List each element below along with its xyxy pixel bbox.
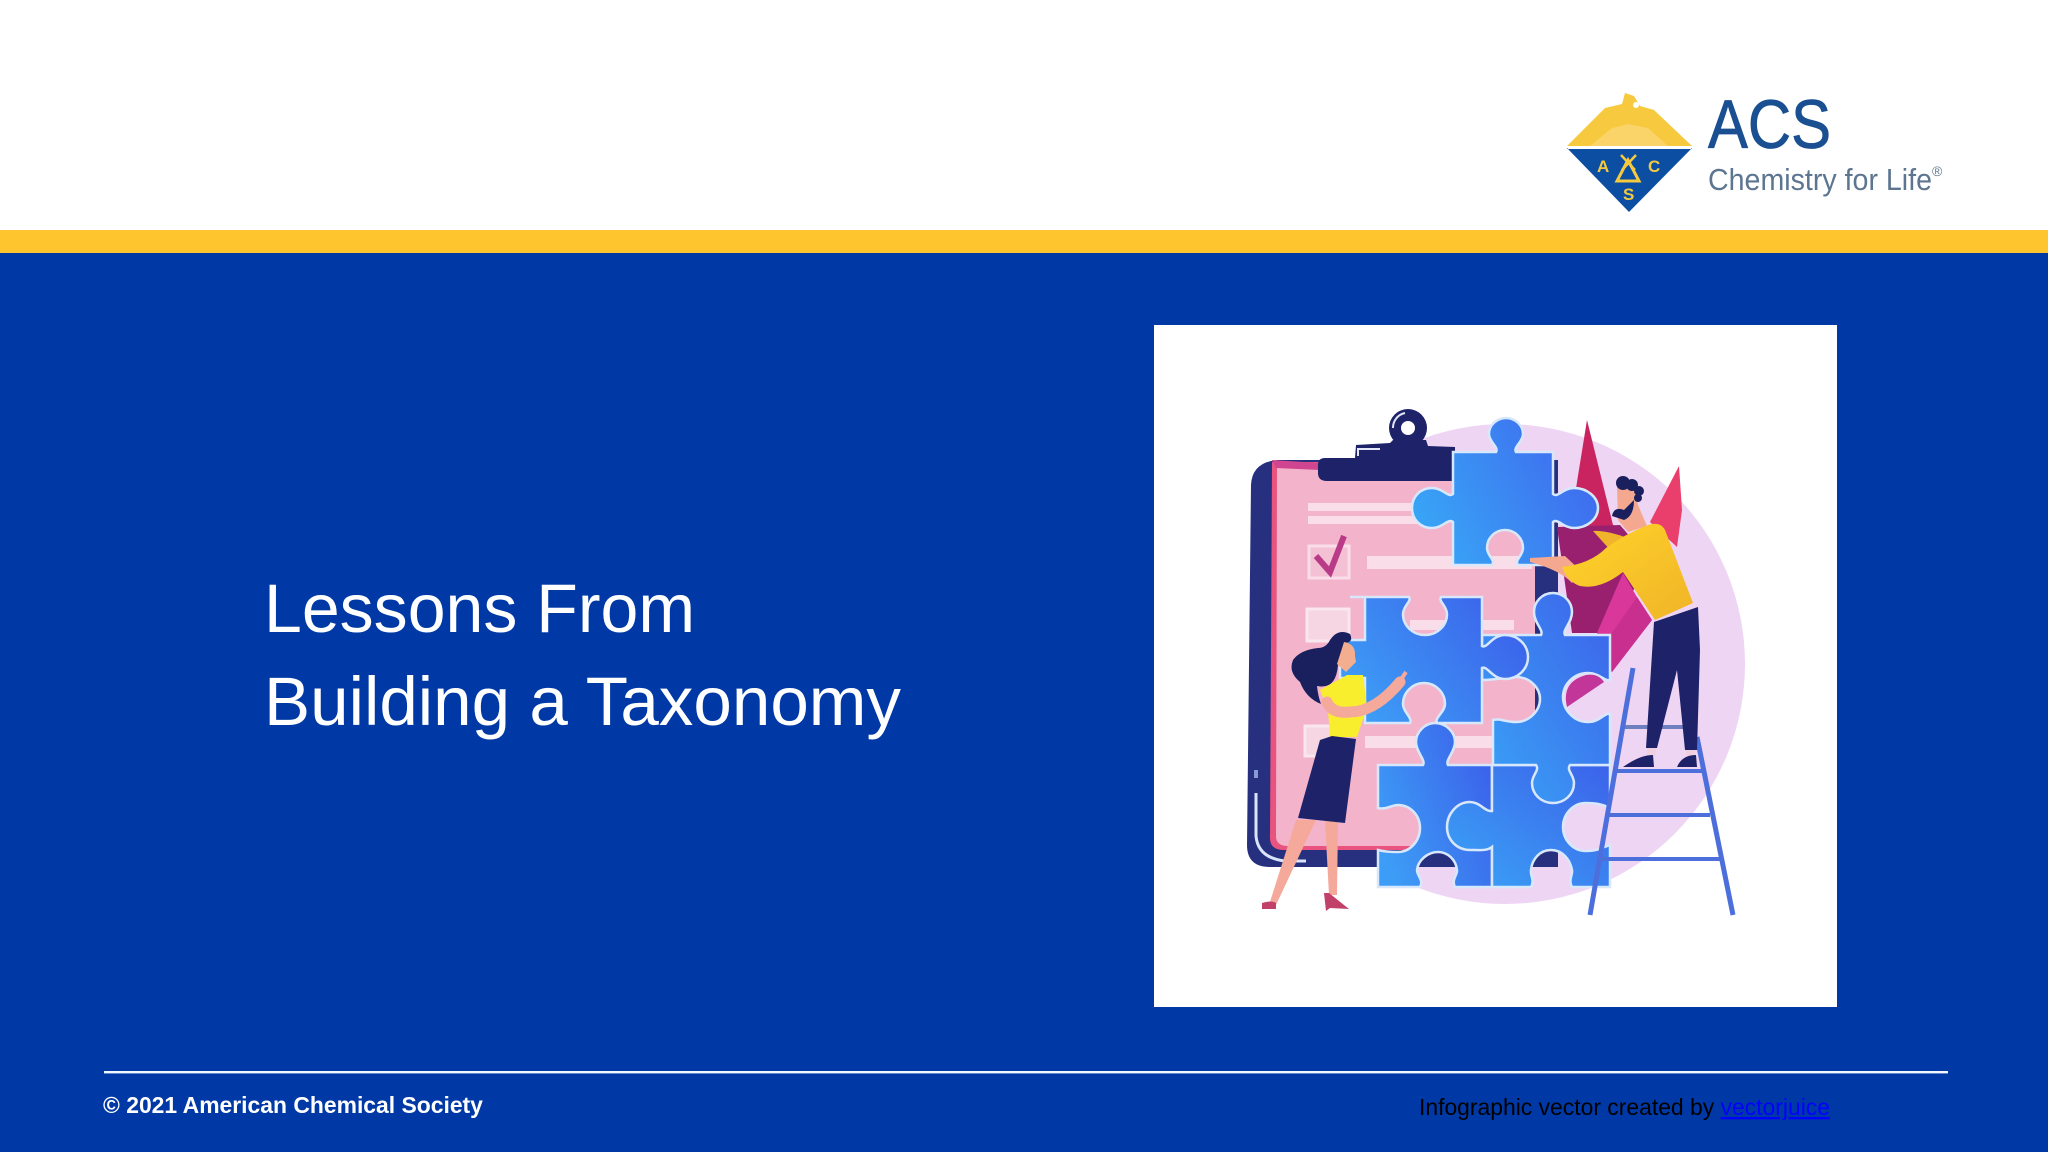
ladder [1590, 668, 1733, 915]
puzzle piece: middle right [1482, 593, 1610, 803]
icon: ACS eagle diamond: S [1623, 185, 1634, 204]
clipboard [1247, 409, 1558, 867]
head [1617, 487, 1647, 532]
man figure [1530, 476, 1700, 767]
shoes [1623, 755, 1654, 767]
puzzle piece: middle left [1340, 597, 1528, 723]
ACS logo [1567, 86, 1943, 212]
footer copyright: © 2021 American Chemical Society [103, 1092, 483, 1118]
blue main background [0, 253, 2048, 1152]
panel: illustration [1154, 325, 1837, 1007]
puzzle piece: lower left [1378, 723, 1492, 887]
puzzle piece: top [1412, 418, 1598, 565]
registered mark: ® [1932, 163, 1943, 179]
legs [1269, 820, 1316, 905]
pants [1646, 607, 1700, 750]
image credit: Infographic vector created by vectorjuice [1419, 1094, 1830, 1120]
clip [1318, 409, 1455, 481]
ankles [1647, 748, 1695, 756]
hair [1292, 632, 1351, 704]
checkbox with check mark [1309, 536, 1349, 578]
footer rule [104, 1071, 1948, 1073]
background circle [1265, 424, 1745, 904]
arm [1327, 682, 1400, 712]
wings behind man [1557, 420, 1682, 672]
logo wordmark ACS: ACS [1708, 86, 1831, 163]
woman figure [1262, 632, 1406, 911]
hair and beard [1612, 476, 1644, 520]
icon: ACS eagle diamond: A [1597, 157, 1609, 176]
notch fill: magenta wing through piece [1566, 675, 1604, 707]
shirt [1562, 524, 1693, 620]
gold divider bar [0, 230, 2048, 253]
white header band [0, 0, 2048, 230]
logo tagline: Chemistry for Life [1708, 162, 1932, 197]
title: Lessons From [264, 570, 695, 647]
face [1337, 642, 1356, 672]
shirt [1320, 675, 1367, 737]
empty checkboxes [1305, 609, 1349, 756]
title [264, 570, 901, 740]
shoes [1262, 902, 1276, 909]
icon: ACS eagle diamond: C [1648, 157, 1660, 176]
far arm [1593, 531, 1628, 552]
icon: ACS eagle diamond [1567, 93, 1692, 212]
puzzle piece: lower right [1447, 765, 1610, 887]
page text lines [1308, 503, 1532, 748]
hand [1530, 556, 1582, 583]
skirt [1298, 736, 1356, 823]
title: Building a Taxonomy [264, 663, 901, 740]
